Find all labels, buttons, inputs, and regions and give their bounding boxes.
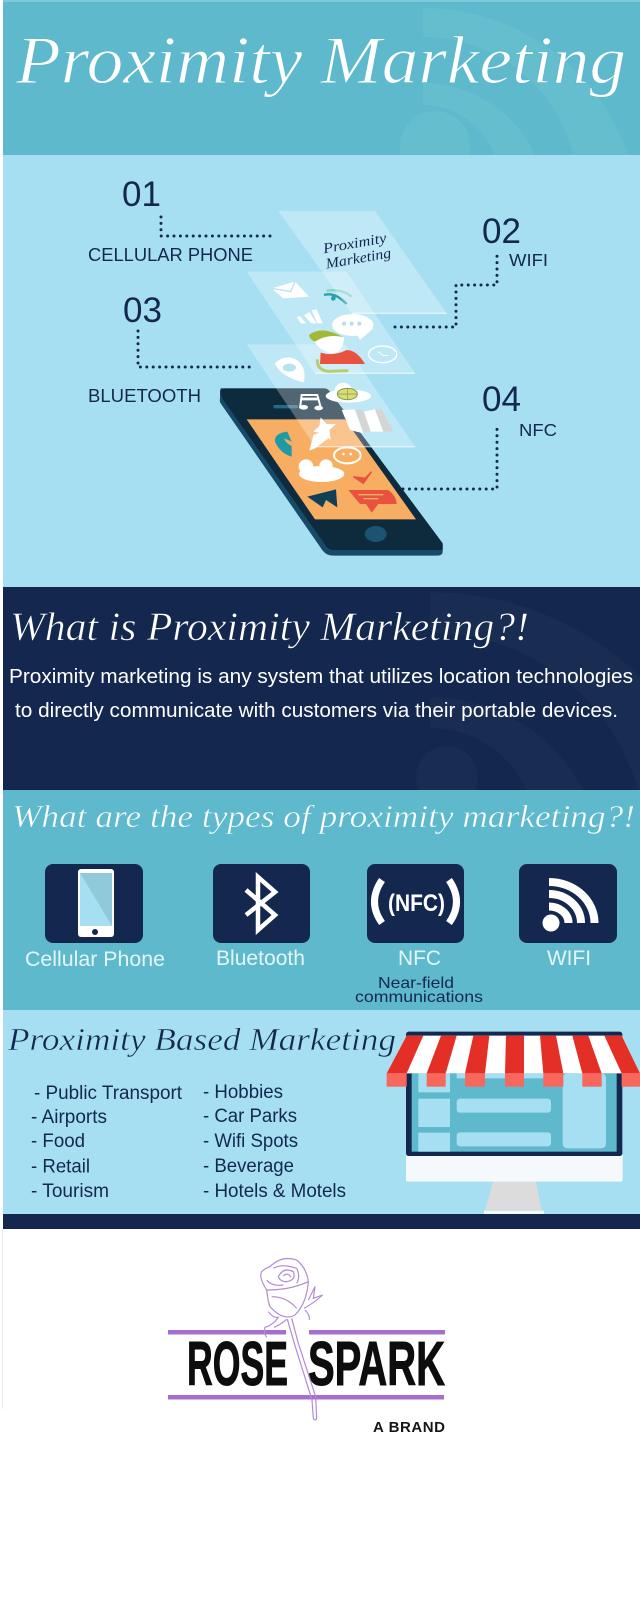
panel: types of proximity marketing <box>3 790 640 1010</box>
type: cellular phone: Cellular Phone <box>25 948 165 971</box>
list: left column: - Retail <box>31 1156 90 1178</box>
dotted connectors <box>138 217 497 489</box>
label 04 nfc <box>482 380 557 440</box>
type: wifi <box>519 864 617 970</box>
illustration: storefront monitor <box>387 1032 640 1214</box>
type: nfc: NFC <box>398 947 441 970</box>
list: right column: - Beverage <box>203 1156 294 1177</box>
label 02 wifi: WIFI <box>509 250 548 270</box>
logo rules <box>168 1330 445 1400</box>
background wifi watermark <box>416 592 640 808</box>
footer band <box>3 1214 640 1229</box>
list: right column: - Hotels & Motels <box>203 1181 346 1202</box>
screen icons <box>275 417 397 513</box>
background wifi watermark <box>400 8 640 181</box>
definition text <box>9 666 633 722</box>
list: left column <box>31 1083 183 1202</box>
label 04 nfc: NFC <box>519 420 557 440</box>
label 01 cellular phone: CELLULAR PHONE <box>88 244 253 265</box>
type: wifi: WIFI <box>547 947 591 970</box>
type: bluetooth <box>213 864 310 970</box>
label 03 bluetooth: BLUETOOTH <box>88 385 201 406</box>
awning <box>387 1036 640 1087</box>
layer 2 <box>247 272 415 373</box>
label 03 bluetooth: 03 <box>123 291 162 330</box>
type: cellular phone <box>25 864 165 971</box>
layer 3 <box>247 344 415 447</box>
layer 1: Marketing <box>324 245 392 273</box>
type: nfc <box>355 864 483 1006</box>
definition text: to directly communicate with customers via their portable devices. <box>15 700 618 722</box>
panel: technologies with layered phone <box>3 155 640 587</box>
definition text: Proximity marketing is any system that utilizes location technologies <box>9 666 633 688</box>
label 02 wifi <box>482 212 548 270</box>
list: right column: - Hobbies <box>203 1082 283 1103</box>
heading: What are the types of proximity marketing?! <box>12 798 635 834</box>
logo wordmark <box>187 1330 445 1399</box>
layer 1 <box>278 211 447 313</box>
panel: what is proximity marketing <box>3 587 640 808</box>
label 01 cellular phone: 01 <box>122 175 161 214</box>
logo tagline: A BRAND <box>373 1419 445 1436</box>
label 03 bluetooth <box>88 291 201 406</box>
list: left column: - Tourism <box>31 1181 109 1202</box>
layer 1: Proximity <box>321 230 388 257</box>
title: Proximity Marketing <box>15 22 626 98</box>
header banner <box>3 0 640 155</box>
list: right column: - Car Parks <box>203 1106 297 1127</box>
logo wordmark: ROSE <box>187 1330 288 1399</box>
left edge line <box>2 1229 3 1409</box>
list: left column: - Airports <box>31 1107 107 1128</box>
logo: rose spark <box>168 1258 445 1436</box>
type: bluetooth: Bluetooth <box>216 947 305 970</box>
type: nfc: communications <box>355 989 483 1006</box>
label 04 nfc: 04 <box>482 380 521 419</box>
label 02 wifi: 02 <box>482 212 521 251</box>
list: right column: - Wifi Spots <box>203 1131 298 1152</box>
heading: Proximity Based Marketing <box>7 1021 396 1057</box>
label 01 cellular phone <box>88 175 253 265</box>
monitor <box>406 1032 623 1214</box>
list: left column: - Public Transport <box>34 1083 183 1104</box>
phone body <box>220 388 443 556</box>
type: nfc: Near-field <box>378 975 454 992</box>
heading: What is Proximity Marketing?! <box>10 604 529 649</box>
illustration: phone with floating layers <box>220 211 447 556</box>
type: nfc: (NFC) <box>388 890 445 917</box>
list: left column: - Food <box>31 1131 85 1152</box>
logo wordmark: SPARK <box>308 1330 445 1399</box>
panel: proximity based marketing <box>3 1010 640 1214</box>
list: right column <box>203 1082 346 1202</box>
logo rose <box>261 1258 323 1420</box>
